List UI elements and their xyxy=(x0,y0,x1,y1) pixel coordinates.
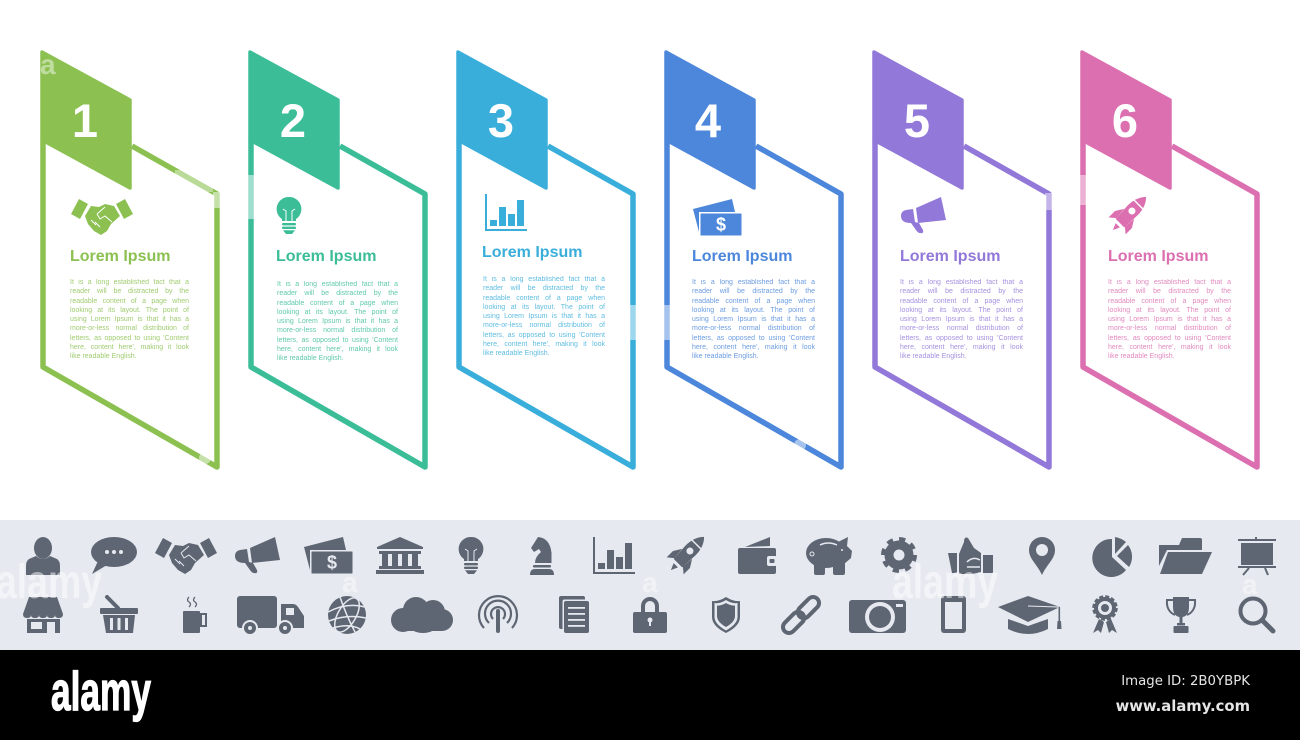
icon: smartphone xyxy=(941,596,966,633)
card 6: pink xyxy=(1080,50,1260,470)
icon: handshake xyxy=(71,199,133,235)
card 4 title: Lorem Ipsum xyxy=(692,248,792,265)
card 6 body text: readable content of a page when xyxy=(1108,298,1231,304)
icon: truck xyxy=(237,596,304,636)
card 5 body text: looking at its layout. The point of xyxy=(900,307,1023,314)
icon: presentation board xyxy=(1238,537,1276,575)
card 6 body text xyxy=(1108,279,1231,360)
number 2: 2 xyxy=(280,94,306,147)
icon: broadcast signal xyxy=(479,596,517,633)
card 6 body text: It is a long established fact that a xyxy=(1108,279,1231,286)
card 4 number flag xyxy=(666,52,754,188)
card 2: teal xyxy=(248,50,428,470)
card 1 body text xyxy=(70,279,189,360)
icon: bar chart xyxy=(485,194,527,231)
card 3: sky blue xyxy=(456,50,636,470)
card 2 body text: It is a long established fact that a xyxy=(277,281,398,288)
icon: coffee mug xyxy=(183,597,206,633)
icon: bar chart xyxy=(593,537,635,574)
card 6 body text: here, content here', making it look xyxy=(1108,344,1231,351)
icon: light bulb xyxy=(277,197,301,234)
card 3 body text: looking at its layout. The point of xyxy=(483,304,605,311)
card 1 body text: readable content of a page when xyxy=(70,298,189,304)
icon: light bulb xyxy=(459,537,483,574)
card 3 body text: more-or-less normal distribution of xyxy=(483,322,605,329)
card 2 title: Lorem Ipsum xyxy=(276,248,376,265)
card 6 body text: like readable English. xyxy=(1108,353,1175,360)
card 3 body text: like readable English. xyxy=(483,350,550,357)
card 1 body text: here, content here', making it look xyxy=(70,344,189,351)
card 5 body text: here, content here', making it look xyxy=(900,344,1023,351)
card 5 number flag xyxy=(874,52,962,188)
icon: handshake xyxy=(155,538,217,574)
card 4 body text: It is a long established fact that a xyxy=(692,279,815,286)
card 5 frame xyxy=(875,140,1049,467)
card 6 body text: more-or-less normal distribution of xyxy=(1108,325,1231,332)
icon: person xyxy=(26,537,60,575)
card 2 body text: readable content of a page when xyxy=(277,300,398,306)
card 6 body text: letters, as opposed to using 'Content xyxy=(1108,334,1231,342)
image id: Image ID: 2B0YBPK xyxy=(1121,674,1250,689)
card 1 body text: It is a long established fact that a xyxy=(70,279,189,286)
icon: piggy bank xyxy=(806,537,852,575)
number 3: 3 xyxy=(488,94,514,147)
card 6 body text: reader will be distracted by the xyxy=(1108,288,1231,295)
card 1 body text: reader will be distracted by the xyxy=(70,288,189,295)
icon: speech bubble xyxy=(91,537,137,574)
card 2 body text: like readable English. xyxy=(277,355,344,362)
icon: folder xyxy=(1159,538,1212,574)
card 5 body text: reader will be distracted by the xyxy=(900,288,1023,295)
icon: chess knight xyxy=(530,537,554,575)
card 1 body text: using Lorem Ipsum is that it has a xyxy=(70,316,189,323)
icon: chain link xyxy=(780,594,822,636)
icon: award ribbon xyxy=(1093,596,1117,633)
card 6 body text: using Lorem Ipsum is that it has a xyxy=(1108,316,1231,323)
icon: thumbs up xyxy=(948,538,993,574)
icon: basket xyxy=(100,597,138,633)
icon: camera xyxy=(849,600,906,633)
card 4 body text: reader will be distracted by the xyxy=(692,288,815,295)
icon: globe xyxy=(328,594,366,636)
card 3 body text xyxy=(483,276,605,357)
card 2 body text: reader will be distracted by the xyxy=(277,290,398,297)
card 5 body text: like readable English. xyxy=(900,353,967,360)
icon: graduation cap xyxy=(998,596,1062,634)
website: www.alamy.com xyxy=(1116,698,1250,715)
number 4: 4 xyxy=(695,94,721,147)
card 5 body text: using Lorem Ipsum is that it has a xyxy=(900,316,1023,323)
card 6 frame xyxy=(1083,140,1257,467)
card 1 body text: letters, as opposed to using 'Content xyxy=(70,334,189,342)
card 2 body text: looking at its layout. The point of xyxy=(277,309,398,316)
watermarks: a xyxy=(642,567,658,598)
number 6: 6 xyxy=(1112,94,1138,147)
card 3 frame xyxy=(459,140,633,467)
footer bar xyxy=(0,650,1300,740)
card 2 body text: letters, as opposed to using 'Content xyxy=(277,336,398,344)
number 5: 5 xyxy=(904,94,930,147)
icon: cash xyxy=(693,199,742,236)
icon: megaphone xyxy=(235,537,280,573)
icon: megaphone xyxy=(901,197,946,233)
card 3 body text: reader will be distracted by the xyxy=(483,285,605,292)
card 1: green xyxy=(40,50,220,470)
card 1 body text: looking at its layout. The point of xyxy=(70,307,189,314)
card 5 body text: It is a long established fact that a xyxy=(900,279,1023,286)
icon: documents xyxy=(559,596,589,633)
icon: rocket xyxy=(662,528,713,579)
icon: trophy xyxy=(1167,597,1195,633)
card 3 number flag xyxy=(458,52,546,188)
panel: icon set xyxy=(0,520,1300,650)
card 5 body text: readable content of a page when xyxy=(900,298,1023,304)
icon: pie chart xyxy=(1092,537,1132,577)
card 4 body text: looking at its layout. The point of xyxy=(692,307,815,314)
card 4 body text: readable content of a page when xyxy=(692,298,815,304)
icon: gear xyxy=(883,539,915,571)
watermarks: a xyxy=(40,49,56,80)
card 6 body text: looking at its layout. The point of xyxy=(1108,307,1231,314)
card 4 frame xyxy=(667,140,841,467)
icon: rocket xyxy=(1104,188,1155,239)
icon: shop xyxy=(23,597,63,633)
card 6 title: Lorem Ipsum xyxy=(1108,248,1208,265)
icon: padlock xyxy=(633,599,667,633)
card 2 body text: here, content here', making it look xyxy=(277,346,398,353)
card 2 number flag xyxy=(250,52,338,188)
alamy logo: alamy xyxy=(51,660,151,722)
card 3 body text: using Lorem Ipsum is that it has a xyxy=(483,313,605,320)
card 4 body text: letters, as opposed to using 'Content xyxy=(692,334,815,342)
icon: cloud xyxy=(391,597,453,633)
icon: shield xyxy=(712,597,740,633)
card 4 body text: using Lorem Ipsum is that it has a xyxy=(692,316,815,323)
card 6 number flag xyxy=(1082,52,1170,188)
card 1 number flag xyxy=(42,52,130,188)
card 5 title: Lorem Ipsum xyxy=(900,248,1000,265)
card 3 title: Lorem Ipsum xyxy=(482,244,582,261)
card 2 body text: using Lorem Ipsum is that it has a xyxy=(277,318,398,325)
icon: wallet xyxy=(738,537,777,574)
icon: bank xyxy=(376,537,424,574)
watermarks: a xyxy=(342,567,358,598)
card 3 body text: here, content here', making it look xyxy=(483,341,605,348)
card 3 body text: readable content of a page when xyxy=(483,294,605,302)
watermarks: alamy xyxy=(892,556,998,609)
card 3 body text: It is a long established fact that a xyxy=(483,276,605,283)
watermarks: a xyxy=(1242,569,1258,600)
card 5 body text xyxy=(900,279,1023,360)
card 5: purple xyxy=(872,50,1052,470)
card 4 body text: here, content here', making it look xyxy=(692,344,815,351)
card 4 body text: like readable English. xyxy=(692,353,759,360)
card 1 frame xyxy=(43,140,217,467)
card 1 body text: like readable English. xyxy=(70,353,137,360)
card 3 body text: letters, as opposed to using 'Content xyxy=(483,332,605,338)
icon: magnifying glass xyxy=(1240,598,1273,631)
card 4 body text xyxy=(692,279,815,360)
card 1 body text: more-or-less normal distribution of xyxy=(70,325,189,332)
card 4: blue xyxy=(664,50,844,470)
card 5 body text: letters, as opposed to using 'Content xyxy=(900,334,1023,342)
card 2 body text: more-or-less normal distribution of xyxy=(277,327,398,334)
icon: map pin xyxy=(1029,537,1055,575)
card 4 body text: more-or-less normal distribution of xyxy=(692,325,815,332)
number 1: 1 xyxy=(72,94,98,147)
card 5 body text: more-or-less normal distribution of xyxy=(900,325,1023,332)
card 2 body text xyxy=(277,281,398,362)
icon: cash xyxy=(304,537,353,574)
card 2 frame xyxy=(251,140,425,467)
card 1 title: Lorem Ipsum xyxy=(70,248,170,265)
watermarks: alamy xyxy=(0,556,102,609)
